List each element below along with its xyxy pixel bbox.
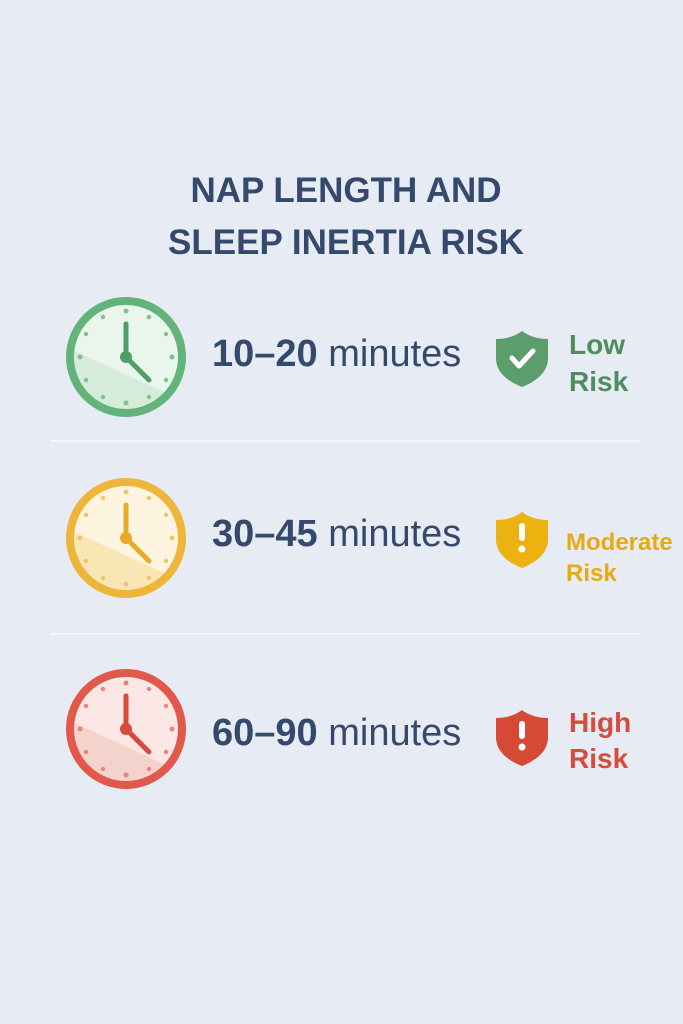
risk label: Low [569,329,625,360]
icon: red shield exclamation [496,710,548,766]
title: SLEEP INERTIA RISK [168,223,524,262]
row: moderate risk [66,482,673,598]
risk label: High [569,707,631,738]
row: low risk [66,301,629,417]
duration text: 60–90 minutes [212,712,461,754]
duration text: 30–45 minutes [212,513,461,555]
row: high risk [66,673,631,789]
row: low risk: Risk [569,366,629,397]
icon: red clock [66,673,186,789]
icon: green clock [66,301,186,417]
title [168,171,524,262]
duration text: 10–20 minutes [212,333,461,375]
icon: green shield check [496,331,548,387]
row: high risk: Risk [569,743,629,774]
icon: yellow shield exclamation [496,512,548,568]
risk label: Moderate [566,529,673,556]
row: moderate risk: Risk [566,560,617,587]
title: NAP LENGTH AND [190,171,502,210]
icon: yellow clock [66,482,186,598]
